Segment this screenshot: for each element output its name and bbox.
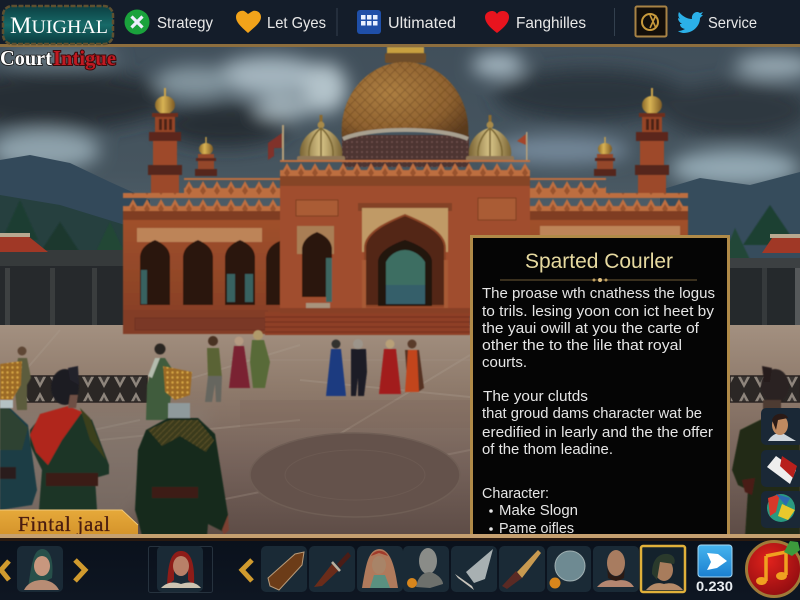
logo subtitle: Court [0, 46, 52, 70]
bottom inventory bar [0, 534, 800, 600]
flag: right [517, 132, 528, 160]
paragraph two: of the thom leadine. [482, 442, 613, 458]
nav item: strategy: Strategy [157, 15, 213, 32]
label tab: fintal jaal: Fintal jaal [18, 512, 110, 536]
title ornament [500, 278, 697, 282]
chevron: previous [242, 560, 252, 581]
black coat figure [351, 339, 367, 396]
portrait tile: green-veiled woman [17, 546, 63, 592]
side tile: portrait [761, 408, 800, 445]
nav item: fanghilles: Fanghilles [516, 15, 586, 32]
character list: Character: [482, 486, 549, 502]
logo text: MUIGHAL [10, 13, 108, 38]
paragraph two: The your clutds [483, 389, 588, 405]
nav item: let gyes: Let Gyes [267, 15, 326, 32]
logo subtitle [0, 46, 116, 70]
nav item: fanghilles [485, 11, 586, 33]
inventory: knife [309, 546, 355, 592]
red robe figure [379, 340, 401, 394]
logo subtitle: Intigue [53, 46, 116, 70]
panel title: Sparted Courler [525, 250, 673, 273]
inventory: brush [499, 546, 545, 592]
inventory: hooded woman [357, 546, 403, 592]
paragraph two: that groud dams character wat be [482, 406, 702, 422]
portrait tile: selected [641, 546, 685, 592]
flag: left [268, 125, 284, 161]
portrait frame: red-haired woman [148, 546, 212, 592]
paragraph one: the yaui owill at you the carte of [482, 321, 700, 337]
green robe figure [250, 330, 270, 388]
label tab: fintal jaal [0, 510, 138, 537]
icon: gold emblem [636, 6, 666, 36]
minaret: far right [635, 88, 669, 196]
button: blue fish arrow [698, 545, 732, 577]
side icons column [761, 408, 800, 528]
olive tunic figure [205, 336, 222, 402]
great arch [362, 208, 448, 306]
nav item: service: Service [708, 15, 757, 32]
seated courtier [146, 344, 174, 420]
sky [0, 0, 800, 340]
balustrade: right [730, 376, 800, 402]
panel: character description [472, 236, 728, 537]
lattice window arch [297, 226, 334, 310]
side tile: colourful map [761, 491, 800, 528]
foreground courtier: far left [0, 361, 37, 510]
stairs [265, 308, 470, 335]
nav item: let gyes [236, 11, 326, 33]
palace [123, 47, 688, 335]
minaret: small left [195, 137, 217, 176]
paragraph two: eredified in learly and the the offer [482, 425, 713, 441]
trees [2, 200, 797, 275]
side building: left [0, 233, 125, 330]
button: music [746, 541, 800, 596]
right wing [530, 178, 688, 321]
foreground courtier: crown and green robe [135, 366, 229, 536]
side building: right [730, 234, 800, 328]
paragraph one: to trils. lesing yoon con ict heet by [482, 304, 715, 320]
logo badge [3, 6, 113, 44]
mountains [0, 155, 800, 300]
balustrade: left [25, 376, 147, 402]
side tile: red and white cloth [761, 450, 800, 487]
crimson robe figure [229, 336, 250, 388]
inventory: dagger [451, 546, 497, 592]
character list [482, 486, 578, 537]
paragraph one: other the to the lile that royal [482, 338, 682, 354]
character list: Pame oifles [499, 521, 574, 537]
inventory: boat shape [261, 546, 307, 592]
portrait tile: bearded man [593, 546, 639, 592]
foreground courtier: red scarf [30, 366, 109, 510]
counter value: 0.230 [696, 578, 733, 594]
far left figure [14, 346, 31, 410]
orange robe figure [405, 340, 424, 392]
paragraph one: The proase wth cnathess the logus [482, 286, 715, 302]
foreground courtier: right edge [732, 366, 800, 537]
central block [280, 160, 530, 316]
figures: mid-ground courtiers [14, 330, 424, 420]
chevron: next [75, 560, 85, 581]
character list: Make Slogn [499, 503, 578, 519]
nav item: ultimated [357, 10, 456, 34]
chevron: far left [1, 561, 9, 580]
small dome: right [466, 115, 514, 162]
small dome: left [297, 115, 345, 162]
paragraph one: courts. [482, 355, 527, 371]
inventory: stone bust [403, 546, 449, 592]
nav item: ultimated: Ultimated [388, 15, 456, 32]
minaret: far left [148, 88, 182, 196]
main dome [342, 47, 469, 167]
paragraph one [482, 286, 715, 371]
paragraph two [482, 389, 713, 458]
inventory: silver disc [547, 546, 591, 592]
minaret: small right [594, 137, 616, 176]
nav item: service [678, 12, 757, 33]
plaza floor [0, 325, 800, 540]
nav item: strategy [124, 10, 213, 34]
blue robe figure [326, 340, 346, 396]
left wing [123, 178, 280, 334]
top navigation bar [0, 0, 800, 70]
